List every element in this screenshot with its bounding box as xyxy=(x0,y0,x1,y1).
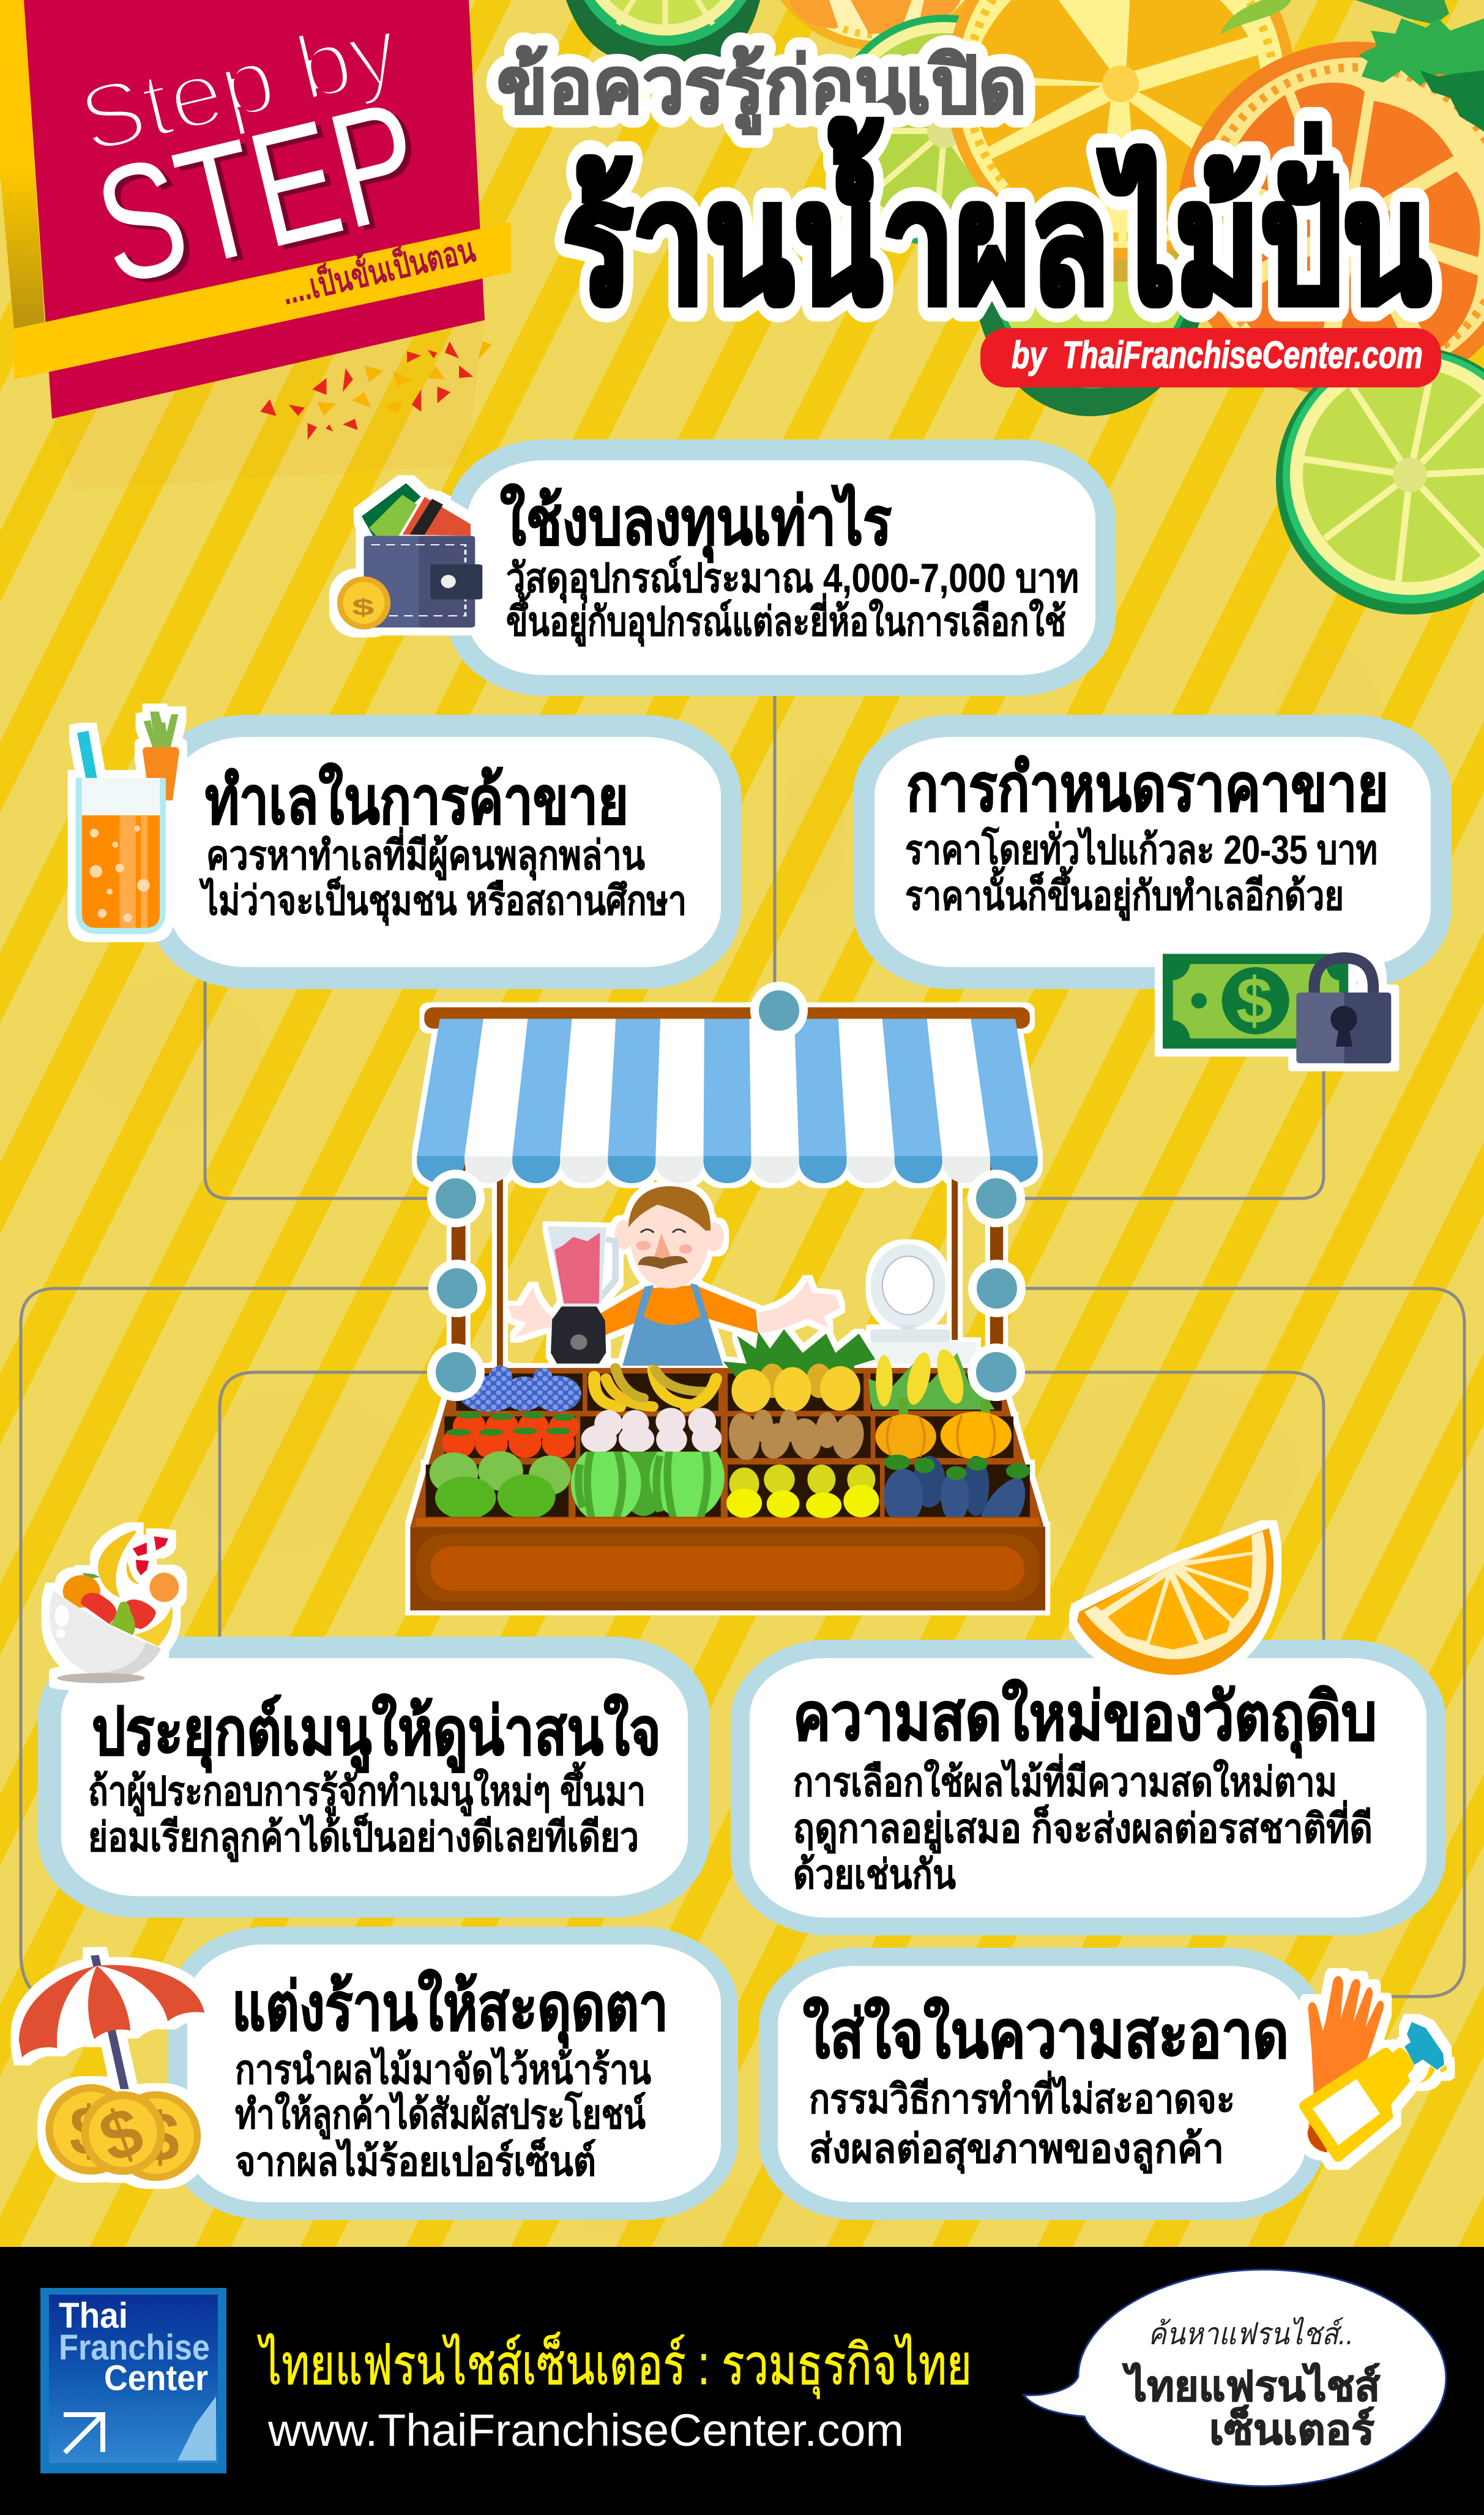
potatoes xyxy=(726,1410,867,1462)
tomatoes xyxy=(442,1411,579,1459)
bubble line 2: เซ็นเตอร์ xyxy=(1209,2405,1374,2453)
background faded fruit shapes xyxy=(80,447,1383,2246)
scale xyxy=(871,1244,976,1364)
side strip xyxy=(0,0,45,329)
heading: cleanliness: ใส่ใจในความสะอาด xyxy=(803,1997,1289,2071)
text: freshness line 3: ด้วยเช่นกัน xyxy=(793,1852,956,1897)
logo word: Franchise: Franchise xyxy=(59,2328,210,2367)
footer band xyxy=(0,2247,1484,2515)
big orange slice xyxy=(945,0,1296,259)
shadow block under leaf xyxy=(1068,178,1196,282)
heading: decoration: แต่งร้านให้สะดุดตา xyxy=(232,1970,668,2049)
icon: banknote and padlock xyxy=(1163,954,1391,1063)
text: cleanliness line 1: กรรมวิธีการทำที่ไม่สะอาดจะ xyxy=(809,2070,1235,2121)
confetti triangles xyxy=(260,342,492,440)
text: location line 1: ควรหาทำเลที่มีผู้คนพลุกพล่าน xyxy=(206,826,645,881)
garlic xyxy=(581,1408,721,1453)
shopkeeper xyxy=(508,1186,840,1366)
text: menu line 2: ย่อมเรียกลูกค้าได้เป็นอย่างดีเลยทีเดียว xyxy=(88,1812,639,1863)
awning stripes xyxy=(417,1019,1038,1156)
byline pill xyxy=(980,328,1441,387)
panel: cleanliness xyxy=(759,1948,1325,2220)
big STEP shadow: STEP xyxy=(86,69,442,323)
lettuce xyxy=(430,1451,571,1519)
text: location line 2: ไม่ว่าจะเป็นชุมชน หรือสถานศึกษา xyxy=(199,876,687,926)
footer URL: www.ThaiFranchiseCenter.com xyxy=(267,2405,904,2456)
text: freshness line 1: การเลือกใช้ผลไม้ที่มีความสดใหม่ตาม xyxy=(793,1753,1337,1804)
logo arrow xyxy=(64,2415,103,2453)
panel: freshness xyxy=(731,1640,1446,1935)
heading: menu: ประยุกต์เมนูให้ดูน่าสนใจ xyxy=(92,1694,661,1773)
text: investment line 2: ขึ้นอยู่กับอุปกรณ์แต่ละยี่ห้อในการเลือกใช้ xyxy=(506,591,1066,647)
text: investment line 1: วัสดุอุปกรณ์ประมาณ 4,000-7,000 บาท xyxy=(506,555,1079,604)
lemons xyxy=(726,1465,879,1518)
awning roof bar xyxy=(424,1007,1030,1029)
icon: umbrella and coins: $ xyxy=(90,2091,153,2178)
mint leaf xyxy=(1024,104,1132,205)
counter body xyxy=(410,1368,1044,1527)
icon: wallet with coin xyxy=(337,483,482,629)
panel: investment cost xyxy=(447,439,1116,696)
text: pricing line 1: ราคาโดยทั่วไปแก้วละ 20-35 บาท xyxy=(905,821,1378,872)
icon: fruit bowl xyxy=(50,1530,179,1683)
icon: umbrella and coins: $ xyxy=(69,2092,108,2170)
banner shadow xyxy=(52,320,485,490)
ribbon caption: ....เป็นขั้นเป็นตอน xyxy=(277,225,479,312)
right lime slice xyxy=(1276,346,1484,615)
logo word: Center: Center xyxy=(104,2358,208,2398)
top orange slice xyxy=(758,0,999,50)
logo xyxy=(40,2288,226,2473)
icon: orange wedge xyxy=(1077,1528,1273,1675)
icon: umbrella and coins xyxy=(19,1955,204,2181)
bubble line 1: ไทยแฟรนไชส์ xyxy=(1122,2362,1380,2410)
heading: investment: ใช้งบลงทุนเท่าไร xyxy=(500,484,892,563)
eggplant caps xyxy=(884,1455,1031,1480)
yellow ribbon xyxy=(14,222,511,379)
bubble small text: ค้นหาแฟรนไชส์.. xyxy=(1148,2317,1354,2351)
produce cells xyxy=(426,1373,1030,1517)
text: cleanliness line 2: ส่งผลต่อสุขภาพของลูกค้า xyxy=(809,2126,1224,2174)
panel: shop decoration xyxy=(168,1927,738,2220)
text: decoration line 1: การนำผลไม้มาจัดไว้หน้าร้าน xyxy=(235,2046,651,2092)
counter front xyxy=(410,1527,1045,1610)
icon: wallet with coin: $ xyxy=(352,594,374,620)
watermelons xyxy=(570,1452,725,1517)
top green leaf xyxy=(1220,0,1291,35)
lower lime xyxy=(974,83,1206,416)
heading: freshness: ความสดใหม่ของวัตถุดิบ xyxy=(793,1680,1377,1758)
top lime slice xyxy=(566,0,760,61)
blender xyxy=(548,1226,616,1364)
small step text: Step by xyxy=(70,0,408,172)
panel: pricing xyxy=(853,715,1452,989)
red orange slice xyxy=(1177,42,1484,399)
big STEP: STEP xyxy=(80,65,437,319)
text: pricing line 2: ราคานั้นก็ขึ้นอยู่กับทำเลอีกด้วย xyxy=(905,865,1344,921)
pineapples xyxy=(723,1329,875,1412)
heading: location: ทำเลในการค้าขาย xyxy=(205,763,628,837)
eggplants xyxy=(884,1456,1026,1517)
logo word: Thai: Thai xyxy=(59,2296,128,2336)
bananas xyxy=(594,1368,716,1407)
banner: step by step xyxy=(0,0,511,490)
panel: location xyxy=(149,715,741,989)
text: freshness line 2: ฤดูกาลอยู่เสมอ ก็จะส่งผลต่อรสชาติที่ดี xyxy=(793,1799,1373,1854)
tomato stems xyxy=(446,1411,575,1436)
panel: menu xyxy=(38,1637,710,1918)
illustration: fruit stall xyxy=(410,1007,1045,1610)
icon: banknote and padlock: $ xyxy=(1236,964,1272,1037)
title: line 1: ข้อควรรู้ก่อนเปิด xyxy=(497,42,1027,135)
icon: umbrella and coins: $ xyxy=(141,2098,179,2176)
mint sprig xyxy=(1355,0,1484,132)
footer Thai slogan: ไทยแฟรนไชส์เซ็นเตอร์ : รวมธุรกิจไทย xyxy=(257,2331,972,2399)
decorative fruit cluster xyxy=(566,0,1484,615)
text: decoration line 2: ทำให้ลูกค้าได้สัมผัสประโยชน์ xyxy=(235,2090,646,2140)
centre lime slice xyxy=(854,15,979,245)
icon: juice glass with carrot xyxy=(76,711,179,934)
grapes xyxy=(458,1366,581,1411)
red flag xyxy=(24,0,485,419)
pumpkins xyxy=(875,1398,1012,1459)
connector nodes xyxy=(431,986,1021,1397)
corn xyxy=(868,1347,995,1410)
text: decoration line 3: จากผลไม้ร้อยเปอร์เซ็นต์ xyxy=(235,2137,596,2184)
stall posts xyxy=(452,1160,1003,1370)
text: menu line 1: ถ้าผู้ประกอบการรู้จักทำเมนูใหม่ๆ ขึ้นมา xyxy=(88,1761,646,1817)
awning scallops xyxy=(417,1156,1038,1183)
counter lip xyxy=(416,1518,1039,1527)
speech bubble xyxy=(1024,2270,1446,2486)
connector lines xyxy=(21,692,1464,1997)
icon: glove and spray bottle xyxy=(1299,1976,1447,2162)
